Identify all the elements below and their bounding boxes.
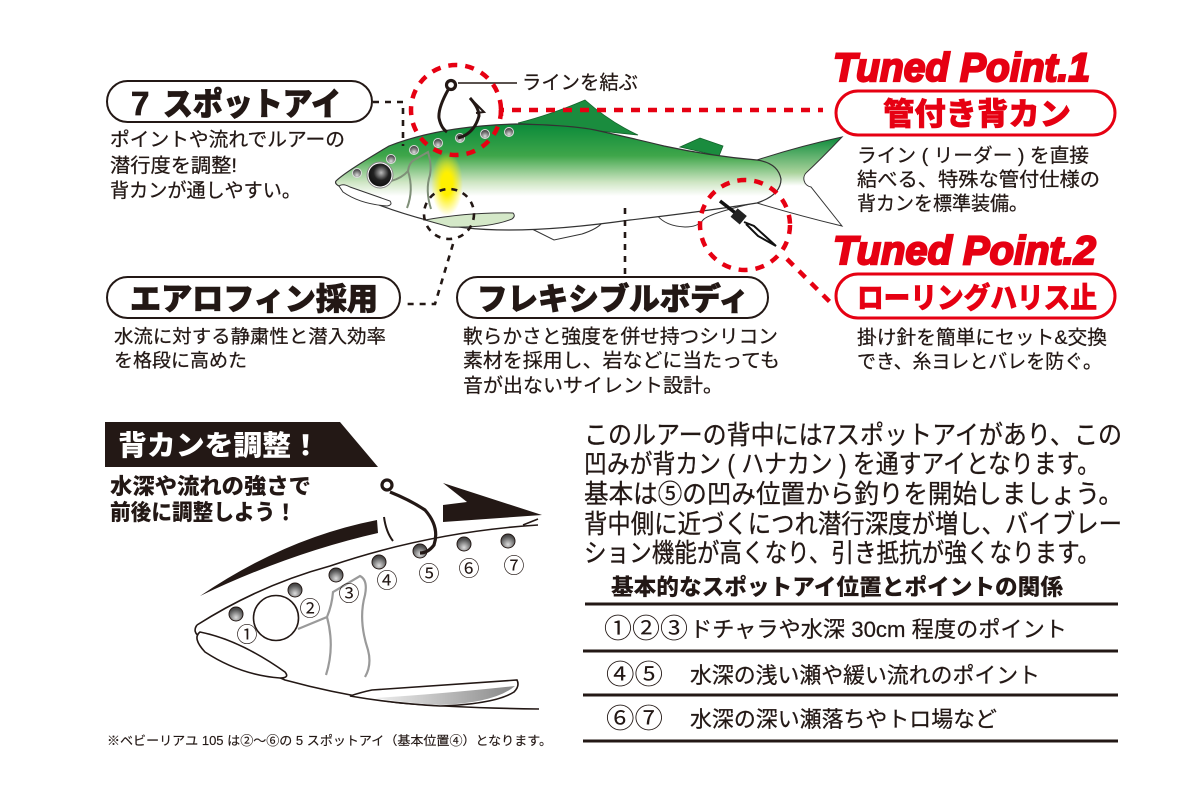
panel: 7 spot eye: 7 bbox=[131, 85, 149, 122]
description paragraph: ション機能が高くなり、引き抵抗が強くなります。 bbox=[584, 538, 1100, 568]
panel: aero fin: を格段に高めた bbox=[114, 350, 247, 371]
panel: 7 spot eye: スポットアイ bbox=[163, 86, 341, 122]
fish head diagram bbox=[195, 480, 542, 709]
panel: 7 spot eye: 背カンが通しやすい。 bbox=[110, 180, 301, 202]
table: spot eye position and fishing point: ⑥⑦ bbox=[606, 704, 663, 734]
footnote: ※ベビーリアユ 105 は②～⑥の 5 スポットアイ（基本位置④）となります。 bbox=[107, 734, 552, 748]
panel: tuned point 1: 背カンを標準装備。 bbox=[857, 193, 1028, 215]
panel: flexible body bbox=[457, 277, 780, 397]
panel: tuned point 1: 管付き背カン bbox=[883, 97, 1071, 132]
panel: flexible body: フレキシブルボディ bbox=[477, 282, 749, 317]
panel: aero fin: エアロフィン採用 bbox=[130, 282, 378, 317]
panel: tuned point 1: 結べる、特殊な管付仕様の bbox=[857, 169, 1100, 191]
table: spot eye position and fishing point: ④⑤ bbox=[606, 660, 663, 690]
panel: aero fin bbox=[107, 277, 400, 371]
table: spot eye position and fishing point bbox=[583, 575, 1118, 741]
panel: 7 spot eye: 潜行度を調整! bbox=[110, 155, 237, 177]
panel: tuned point 1: Tuned Point.1 bbox=[833, 46, 1090, 90]
adjust subheading: 水深や流れの強さで bbox=[110, 474, 311, 499]
description paragraph: このルアーの背中には7スポットアイがあり、この bbox=[584, 420, 1122, 450]
spot eye numbers: ③ bbox=[338, 583, 360, 606]
description paragraph: 背中側に近づくにつれ潜行深度が増し、バイブレー bbox=[584, 509, 1122, 539]
description paragraph: 基本は⑤の凹み位置から釣りを開始しましょう。 bbox=[584, 479, 1123, 509]
adjust subheading: 前後に調整しよう！ bbox=[110, 500, 296, 525]
description paragraph: 凹みが背カン ( ハナカン ) を通すアイとなります。 bbox=[584, 449, 1100, 479]
table: spot eye position and fishing point: 水深の深い瀬落ちやトロ場など bbox=[690, 707, 997, 732]
banner heading: 背カンを調整！ bbox=[118, 430, 320, 461]
panel: tuned point 2: Tuned Point.2 bbox=[833, 229, 1096, 273]
spot eye numbers: ② bbox=[300, 598, 320, 621]
panel: 7 spot eye bbox=[107, 81, 372, 202]
spot eye numbers: ⑥ bbox=[458, 558, 480, 581]
panel: tuned point 1: ライン ( リーダー ) を直接 bbox=[857, 145, 1089, 167]
spot eye numbers: ⑤ bbox=[418, 563, 440, 586]
panel: flexible body: 軟らかさと強度を併せ持つシリコン bbox=[463, 326, 778, 348]
panel: 7 spot eye: ポイントや流れでルアーの bbox=[110, 129, 345, 151]
line label: ラインを結ぶ bbox=[522, 72, 638, 94]
spot eye numbers: ④ bbox=[376, 570, 398, 593]
red callout 1 bbox=[411, 65, 823, 155]
black connector lines bbox=[373, 102, 625, 304]
table: spot eye position and fishing point: ドチャラや水深 30cm 程度のポイント bbox=[690, 617, 1067, 642]
table: spot eye position and fishing point: 基本的なスポットアイ位置とポイントの関係 bbox=[611, 575, 1063, 600]
red callout 2 with swivel bbox=[700, 180, 830, 302]
spot eye numbers bbox=[236, 555, 524, 647]
hook on fish bbox=[439, 80, 484, 138]
panel: aero fin: 水流に対する静粛性と潜入効率 bbox=[114, 326, 386, 347]
table: spot eye position and fishing point: 水深の浅い瀬や緩い流れのポイント bbox=[690, 663, 1040, 688]
fish illustration bbox=[336, 100, 842, 240]
panel: tuned point 2 bbox=[833, 229, 1115, 373]
spot eye numbers: ① bbox=[236, 624, 258, 647]
panel: tuned point 1 bbox=[833, 46, 1115, 215]
panel: tuned point 2: ローリングハリス止 bbox=[857, 281, 1097, 315]
adjust subheading bbox=[110, 474, 311, 525]
description paragraph bbox=[584, 420, 1123, 568]
panel: flexible body: 音が出ないサイレント設計。 bbox=[463, 375, 723, 397]
panel: tuned point 2: でき、糸ヨレとバレを防ぐ。 bbox=[857, 351, 1102, 373]
spot eye numbers: ⑦ bbox=[504, 555, 524, 578]
panel: flexible body: 素材を採用し、岩などに当たっても bbox=[463, 350, 780, 372]
banner heading bbox=[105, 422, 378, 467]
panel: tuned point 2: 掛け針を簡単にセット&交換 bbox=[857, 327, 1107, 349]
table: spot eye position and fishing point: ①②③ bbox=[604, 614, 688, 644]
